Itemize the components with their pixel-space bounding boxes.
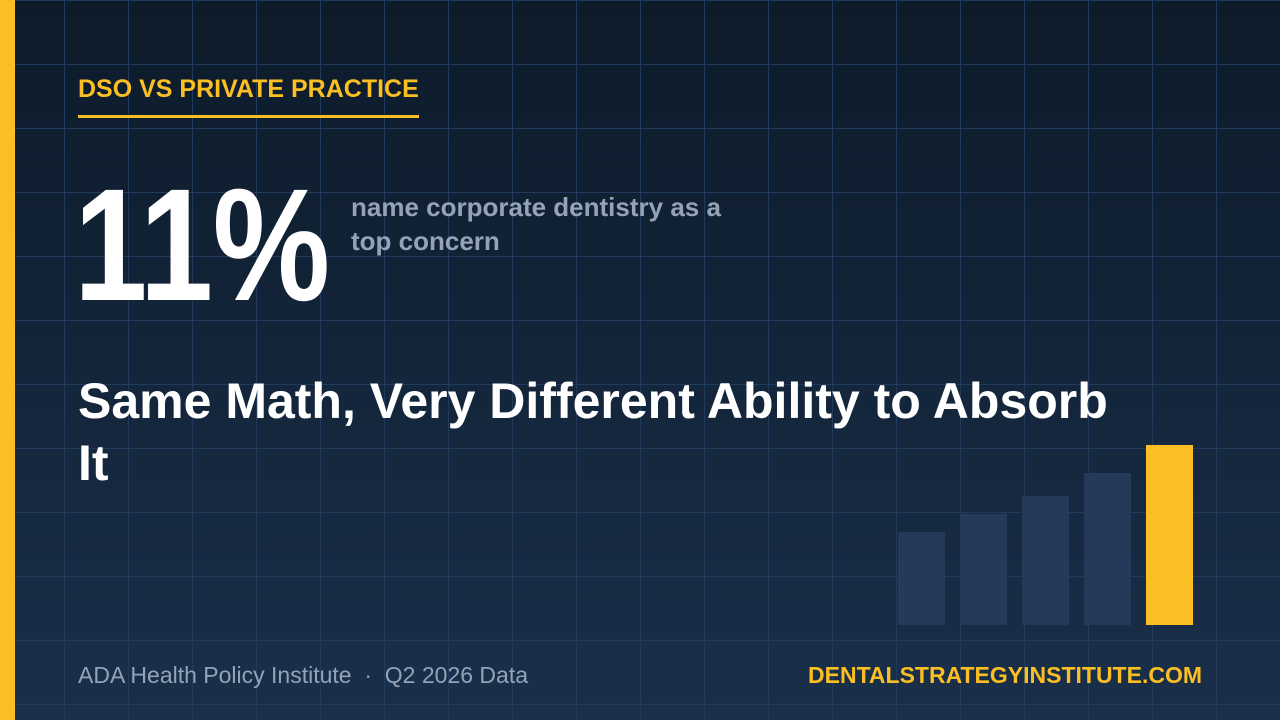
source line: ADA Health Policy Institute · Q2 2026 Data [78,662,528,688]
big statistic: 11% [74,155,330,334]
eyebrow heading: DSO VS PRIVATE PRACTICE [78,75,419,103]
bar 2 [960,514,1007,625]
statistic description: top concern [351,226,500,256]
bar 5 highlighted [1146,445,1193,625]
eyebrow heading [78,72,419,118]
bar 4 [1084,473,1131,625]
bar 3 [1022,496,1069,625]
bar chart [898,445,1193,625]
main headline: Same Math, Very Different Ability to Absorb [78,373,1108,429]
main headline [78,373,1108,491]
bar 1 [898,532,945,625]
website: DENTALSTRATEGYINSTITUTE.COM [808,662,1202,688]
statistic description: name corporate dentistry as a [351,192,721,222]
statistic description [351,192,722,256]
accent bar [0,0,15,720]
main headline: It [78,435,109,491]
